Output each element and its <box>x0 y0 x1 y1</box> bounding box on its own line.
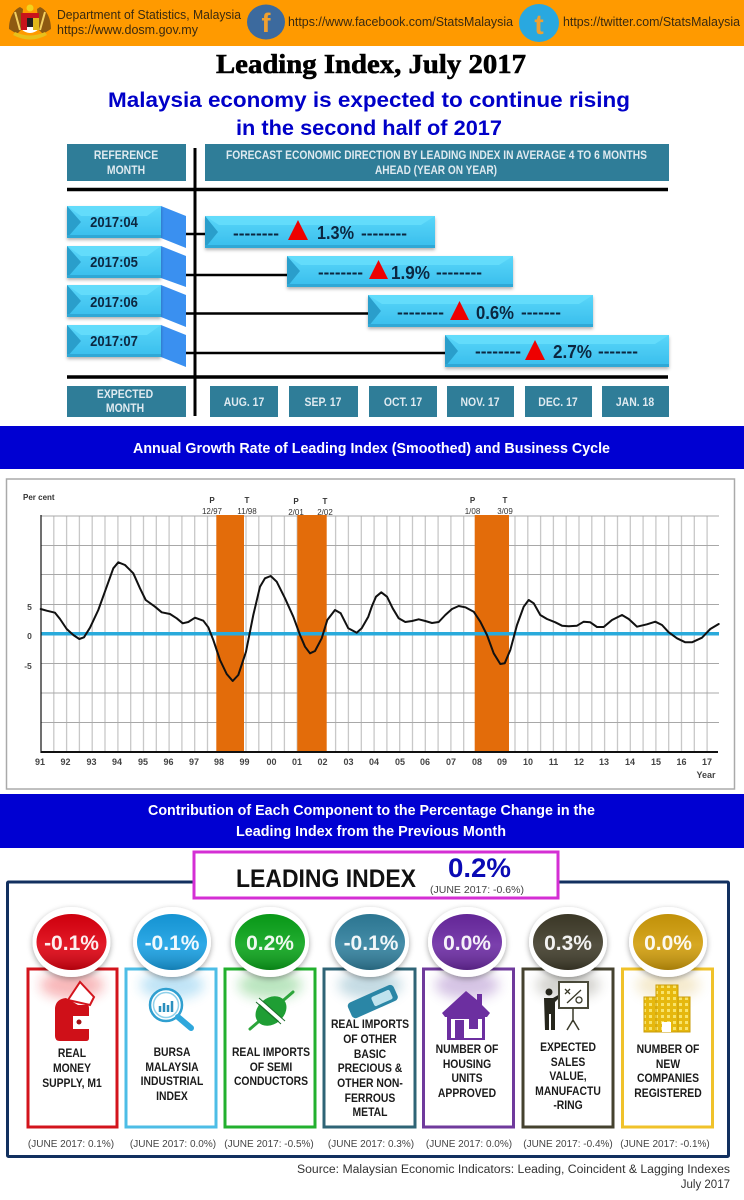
section band: contribution <box>0 794 744 848</box>
forecast bar 1.3%: -------- <box>233 224 279 243</box>
chart axis title: Per cent <box>23 493 55 502</box>
subtitle <box>108 89 630 140</box>
peak and trough labels: P <box>470 496 476 505</box>
x axis labels: 11 <box>549 757 558 767</box>
facebook link: https://www.facebook.com/StatsMalaysia <box>288 15 513 29</box>
prior month: (JUNE 2017: 0.0%) <box>130 1139 216 1150</box>
recession band 2001 <box>297 515 327 752</box>
label: VALUE, <box>549 1070 587 1083</box>
x axis labels: 17 <box>702 757 712 767</box>
forecast bar 0.6%: -------- <box>397 303 444 322</box>
value bubble <box>629 907 707 977</box>
twitter link: https://twitter.com/StatsMalaysia <box>563 15 740 29</box>
y axis labels <box>24 602 32 671</box>
peak and trough labels: T <box>503 496 508 505</box>
value bubble <box>529 907 607 977</box>
reference month 2017:07: 2017:07 <box>90 332 138 349</box>
panel: forecast table <box>67 144 669 417</box>
x axis labels: 14 <box>625 757 635 767</box>
label <box>42 1047 102 1090</box>
forecast bar 0.6% <box>368 295 593 327</box>
label: REAL IMPORTS <box>232 1046 311 1059</box>
prior month: (JUNE 2017: -0.1%) <box>620 1139 710 1150</box>
label: NUMBER OF <box>436 1043 499 1056</box>
expected month row: AUG. 17 <box>224 396 264 409</box>
y axis labels: -5 <box>24 661 32 671</box>
forecast bar 1.3% <box>205 216 435 248</box>
reference month 2017:05: 2017:05 <box>90 253 138 270</box>
x axis labels: 15 <box>651 757 661 767</box>
label: BURSA <box>154 1046 190 1059</box>
reference month 2017:05 <box>67 246 186 287</box>
x axis labels: 92 <box>60 757 71 767</box>
section band: contribution: Contribution of Each Component to the Percentage Change in the <box>148 802 595 819</box>
label: -RING <box>553 1099 583 1112</box>
value bubble <box>428 907 506 977</box>
value bubble: -0.1% <box>44 932 99 955</box>
panel: line chart <box>6 479 734 789</box>
x axis labels: 16 <box>676 757 687 767</box>
peak and trough labels: T <box>245 496 250 505</box>
expected month row: DEC. 17 <box>538 396 578 409</box>
peak and trough labels: P <box>209 496 215 505</box>
prior month: (JUNE 2017: -0.4%) <box>523 1139 613 1150</box>
header banner <box>0 0 744 46</box>
x axis labels: 04 <box>369 757 379 767</box>
label: SUPPLY, M1 <box>42 1077 102 1090</box>
forecast bar 0.6%: ------- <box>521 303 561 322</box>
x axis labels: 13 <box>599 757 609 767</box>
reference month 2017:06: 2017:06 <box>90 293 138 310</box>
card: semiconductors <box>224 907 315 1150</box>
prior month: (JUNE 2017: -0.5%) <box>224 1139 314 1150</box>
x axis labels: 08 <box>472 757 482 767</box>
label: REGISTERED <box>634 1087 702 1100</box>
peak and trough labels: 3/09 <box>497 507 513 516</box>
icon: wallet <box>55 982 94 1041</box>
y axis labels: 0 <box>27 631 32 641</box>
header agency text <box>57 8 241 37</box>
label <box>436 1043 499 1100</box>
x axis labels: 94 <box>112 757 122 767</box>
icon: plug <box>250 990 293 1032</box>
label: SALES <box>551 1056 586 1069</box>
label: OTHER NON- <box>337 1077 403 1090</box>
icon: magnifier chart <box>150 989 191 1028</box>
icon: facebook: f <box>262 8 272 38</box>
expected month row: JAN. 18 <box>616 396 654 409</box>
label: MONEY <box>53 1062 91 1075</box>
forecast bar 1.3%: 1.3% <box>317 223 354 243</box>
x axis labels: 93 <box>86 757 97 767</box>
label: UNITS <box>451 1072 483 1085</box>
x axis labels: 03 <box>343 757 354 767</box>
section band: contribution: Leading Index from the Previous Month <box>236 823 506 840</box>
table header: forecast direction <box>205 144 669 181</box>
label: METAL <box>353 1106 388 1119</box>
value bubble <box>133 907 211 977</box>
icon: presenter and board <box>544 982 588 1030</box>
label <box>535 1041 601 1112</box>
leading index curve <box>41 562 719 681</box>
zero line <box>41 632 719 635</box>
section band: annual growth rate: Annual Growth Rate of Leading Index (Smoothed) and Business Cycle <box>133 440 610 457</box>
x axis labels: 02 <box>317 757 328 767</box>
leading index headline: (JUNE 2017: -0.6%) <box>430 885 524 896</box>
label <box>634 1043 702 1100</box>
x axis labels <box>35 757 716 780</box>
icon: facebook <box>247 4 285 40</box>
source note: Source: Malaysian Economic Indicators: Leading, Coincident & Lagging Indexes <box>297 1164 730 1176</box>
label <box>232 1046 311 1088</box>
card: real money supply <box>28 907 117 1150</box>
label: FERROUS <box>345 1092 396 1105</box>
forecast bar 1.9%: 1.9% <box>391 263 430 283</box>
reference month 2017:04: 2017:04 <box>90 213 138 230</box>
x axis labels: 09 <box>497 757 507 767</box>
label: EXPECTED <box>540 1041 596 1054</box>
x axis labels: 97 <box>189 757 199 767</box>
label: NEW <box>656 1058 680 1071</box>
prior month: (JUNE 2017: 0.0%) <box>426 1139 512 1150</box>
value bubble: 0.3% <box>544 932 592 955</box>
subtitle: Malaysia economy is expected to continue rising <box>108 89 630 112</box>
y axis labels: 5 <box>27 602 32 612</box>
expected month row <box>67 386 669 417</box>
peak and trough labels <box>202 496 513 517</box>
x axis labels: 07 <box>446 757 456 767</box>
panel: components frame <box>8 882 728 1156</box>
icon: house <box>442 991 490 1040</box>
forecast bar 2.7%: 2.7% <box>553 342 592 362</box>
label: OF OTHER <box>343 1033 397 1046</box>
section band: annual growth rate <box>0 426 744 469</box>
x axis labels: 05 <box>395 757 405 767</box>
label: REAL IMPORTS <box>331 1018 410 1031</box>
title: Leading Index, July 2017 <box>216 49 526 79</box>
card: bursa malaysia <box>126 907 216 1150</box>
label: REAL <box>58 1047 86 1060</box>
table header: reference month <box>67 144 186 181</box>
expected month row: OCT. 17 <box>384 396 422 409</box>
leading index headline <box>194 852 558 898</box>
x axis labels: 12 <box>574 757 584 767</box>
icon: usb bar <box>347 984 399 1019</box>
card: housing units <box>424 907 514 1150</box>
leading index headline: 0.2% <box>448 853 511 883</box>
peak and trough labels: 12/97 <box>202 507 223 516</box>
peak and trough labels: 11/98 <box>237 507 257 516</box>
x axis labels: 01 <box>292 757 302 767</box>
forecast bar 1.9%: -------- <box>318 263 363 282</box>
icon: twitter <box>519 4 559 42</box>
expected month row: NOV. 17 <box>460 396 500 409</box>
card: expected sales <box>523 907 613 1150</box>
leading index headline: LEADING INDEX <box>236 865 416 893</box>
recession band 1998 <box>216 515 244 752</box>
label: HOUSING <box>443 1058 491 1071</box>
label <box>141 1046 204 1103</box>
reference month 2017:04 <box>67 206 186 248</box>
prior month: (JUNE 2017: 0.1%) <box>28 1139 114 1150</box>
forecast bar 2.7%: -------- <box>475 342 521 361</box>
icon: buildings <box>644 985 690 1032</box>
label: MALAYSIA <box>145 1061 199 1074</box>
subtitle: in the second half of 2017 <box>236 117 502 140</box>
source note: July 2017 <box>681 1179 730 1191</box>
x axis labels: 00 <box>266 757 277 767</box>
label: BASIC <box>354 1048 386 1061</box>
x axis labels: 91 <box>35 757 45 767</box>
source note <box>297 1164 730 1191</box>
table header: forecast direction: FORECAST ECONOMIC DIRECTION BY LEADING INDEX IN AVERAGE 4 TO 6 MONTHS <box>226 148 647 162</box>
x axis labels: 95 <box>138 757 148 767</box>
label: INDEX <box>156 1090 188 1103</box>
value bubble <box>231 907 309 977</box>
x axis labels: 98 <box>214 757 224 767</box>
value bubble: 0.0% <box>443 932 491 955</box>
x axis labels: 10 <box>523 757 533 767</box>
header agency text: Department of Statistics, Malaysia <box>57 8 241 22</box>
label: APPROVED <box>438 1087 496 1100</box>
value bubble <box>331 907 409 977</box>
header agency text: https://www.dosm.gov.my <box>57 23 199 37</box>
peak and trough labels: 2/01 <box>288 508 304 517</box>
card: other metals <box>324 907 415 1150</box>
label: MANUFACTU <box>535 1085 601 1098</box>
x axis labels: 96 <box>163 757 174 767</box>
icon: twitter: t <box>534 9 544 40</box>
forecast bar 1.9%: -------- <box>436 263 482 282</box>
card: new companies <box>620 907 712 1150</box>
recession band 2008 <box>475 515 509 752</box>
label: NUMBER OF <box>637 1043 700 1056</box>
expected month row: SEP. 17 <box>305 396 341 409</box>
peak and trough labels: 1/08 <box>465 507 481 516</box>
peak and trough labels: P <box>293 497 299 506</box>
value bubble: 0.0% <box>644 932 692 955</box>
table header: forecast direction: AHEAD (YEAR ON YEAR) <box>375 163 497 177</box>
expected month row: EXPECTED <box>97 388 153 401</box>
reference month 2017:06 <box>67 285 186 327</box>
x axis labels: 99 <box>239 757 250 767</box>
label: INDUSTRIAL <box>141 1075 204 1088</box>
forecast bar 0.6%: 0.6% <box>476 303 514 323</box>
forecast bar 1.9% <box>287 256 513 287</box>
table header: reference month: MONTH <box>107 164 145 177</box>
reference month 2017:07 <box>67 325 186 367</box>
value bubble <box>32 907 110 977</box>
table rules and connectors <box>67 148 668 416</box>
forecast bar 2.7%: ------- <box>598 342 638 361</box>
label: COMPANIES <box>637 1072 699 1085</box>
label: CONDUCTORS <box>234 1075 309 1088</box>
table header: reference month: REFERENCE <box>94 149 159 162</box>
forecast bar 1.3%: -------- <box>361 224 407 243</box>
chart grid <box>41 516 719 752</box>
x axis labels: 06 <box>420 757 430 767</box>
forecast bar 2.7% <box>445 335 669 367</box>
value bubble: -0.1% <box>344 932 399 955</box>
prior month: (JUNE 2017: 0.3%) <box>328 1139 414 1150</box>
expected month row: MONTH <box>106 402 144 415</box>
value bubble: 0.2% <box>246 932 294 955</box>
icon: coat of arms <box>9 4 51 40</box>
label <box>331 1018 410 1119</box>
x axis labels: Year <box>696 770 716 780</box>
label: OF SEMI <box>250 1061 292 1074</box>
chart axes <box>41 515 718 753</box>
label: PRECIOUS & <box>338 1062 402 1075</box>
value bubble: -0.1% <box>145 932 200 955</box>
peak and trough labels: 2/02 <box>317 508 333 517</box>
peak and trough labels: T <box>323 497 328 506</box>
